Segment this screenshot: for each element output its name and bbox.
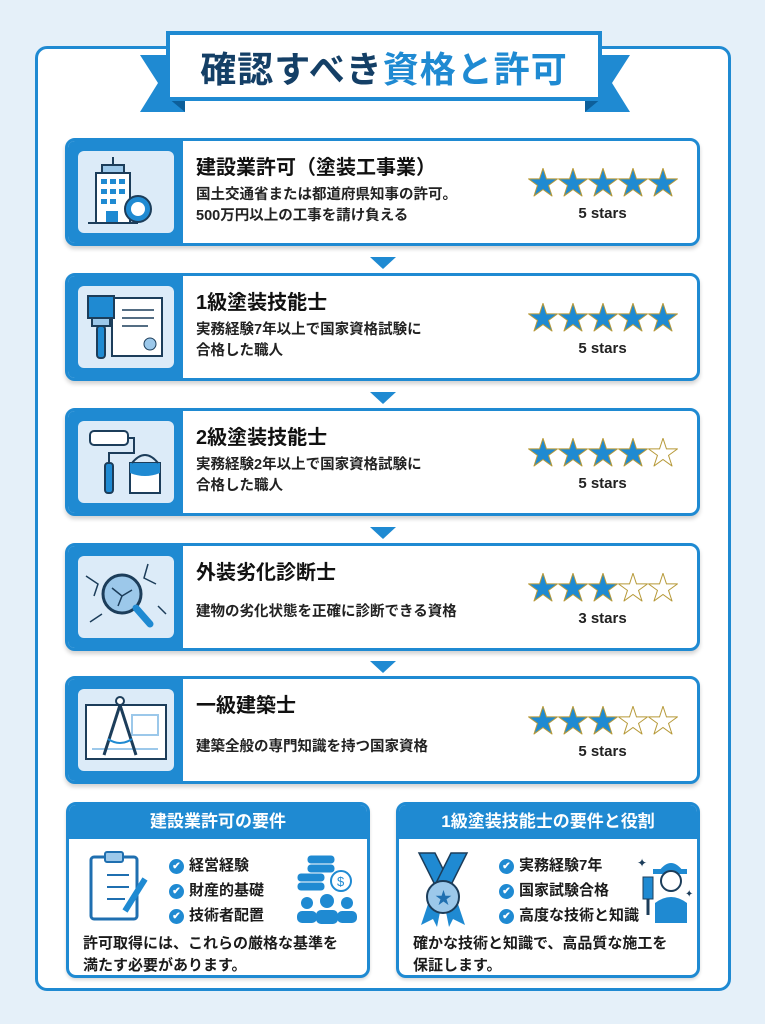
icon: clipboard bbox=[90, 851, 148, 920]
icon: painter: ✦ bbox=[637, 856, 647, 870]
card 1: 国土交通省または都道府県知事の許可。 bbox=[196, 187, 457, 203]
card 2: 1級塗装技能士 bbox=[196, 292, 327, 314]
panel: 1st class painter role: 国家試験合格 bbox=[519, 882, 609, 899]
icon: magnifier on crack bbox=[68, 546, 183, 648]
panel: 1st class painter role: 実務経験7年 bbox=[519, 857, 602, 874]
card 3: 合格した職人 bbox=[196, 478, 283, 494]
panel: construction permit requirements: 建設業許可の要件 bbox=[150, 812, 286, 831]
panel: construction permit requirements: 許可取得には、これらの厳格な基準を bbox=[83, 935, 338, 952]
card 3: 実務経験2年以上で国家資格試験に bbox=[196, 457, 422, 473]
panel: 1st class painter role bbox=[396, 802, 700, 978]
rating: ★★★★★ bbox=[528, 571, 678, 606]
arrow bbox=[370, 661, 396, 673]
title text: 確認すべき資格と許可 bbox=[200, 49, 568, 90]
icon: coins and people: $ bbox=[337, 874, 345, 889]
card 2 bbox=[65, 273, 700, 381]
panel: construction permit requirements: 財産的基礎 bbox=[189, 882, 264, 899]
card 5 bbox=[65, 676, 700, 784]
rating: 5 stars bbox=[578, 743, 627, 760]
icon: blueprint compass bbox=[68, 679, 183, 781]
rating bbox=[528, 571, 678, 627]
card 2: 実務経験7年以上で国家資格試験に bbox=[196, 322, 422, 338]
card 4 bbox=[65, 543, 700, 651]
icon: painter: ✦ bbox=[685, 889, 693, 900]
icon: medal bbox=[418, 852, 468, 927]
card 3: 2級塗装技能士 bbox=[196, 427, 327, 449]
rating: ★★★★★ bbox=[528, 436, 678, 471]
card 4: 建物の劣化状態を正確に診断できる資格 bbox=[196, 604, 457, 620]
panel: 1st class painter role: 1級塗装技能士の要件と役割 bbox=[441, 812, 655, 831]
arrow bbox=[370, 257, 396, 269]
icon: painter bbox=[637, 856, 693, 923]
panel: construction permit requirements bbox=[66, 802, 370, 978]
rating bbox=[528, 301, 678, 357]
rating: 5 stars bbox=[578, 340, 627, 357]
rating: 5 stars bbox=[578, 475, 627, 492]
panel: construction permit requirements: 満たす必要があります。 bbox=[83, 957, 247, 974]
card 3 bbox=[65, 408, 700, 516]
card 1 bbox=[65, 138, 700, 246]
arrow bbox=[370, 392, 396, 404]
arrow bbox=[370, 527, 396, 539]
card 2: 合格した職人 bbox=[196, 343, 283, 359]
icon: medal: ★ bbox=[435, 889, 452, 908]
rating: ★★★★★ bbox=[528, 166, 678, 201]
icon: brush and certificate bbox=[68, 276, 183, 378]
card 5: 一級建築士 bbox=[196, 695, 296, 717]
title banner bbox=[140, 31, 630, 112]
rating: 3 stars bbox=[578, 610, 627, 627]
icon: roller and can bbox=[68, 411, 183, 513]
icon: building bbox=[68, 141, 183, 243]
card 1: 建設業許可（塗装工事業） bbox=[196, 157, 436, 179]
panel: construction permit requirements: 技術者配置 bbox=[189, 907, 264, 924]
card 5: 建築全般の専門知識を持つ国家資格 bbox=[196, 739, 428, 755]
card 1: 500万円以上の工事を請け負える bbox=[196, 208, 408, 224]
rating: ★★★★★ bbox=[528, 301, 678, 336]
rating bbox=[528, 436, 678, 492]
rating: 5 stars bbox=[578, 205, 627, 222]
icon: coins and people bbox=[297, 856, 357, 924]
card 4: 外装劣化診断士 bbox=[196, 562, 336, 584]
rating bbox=[528, 166, 678, 222]
rating bbox=[528, 704, 678, 760]
panel: 1st class painter role: 保証します。 bbox=[413, 957, 502, 974]
rating: ★★★★★ bbox=[528, 704, 678, 739]
panel: 1st class painter role: 高度な技術と知識 bbox=[519, 907, 639, 924]
panel: construction permit requirements: 経営経験 bbox=[189, 857, 249, 874]
panel: 1st class painter role: 確かな技術と知識で、高品質な施工を bbox=[413, 935, 667, 952]
